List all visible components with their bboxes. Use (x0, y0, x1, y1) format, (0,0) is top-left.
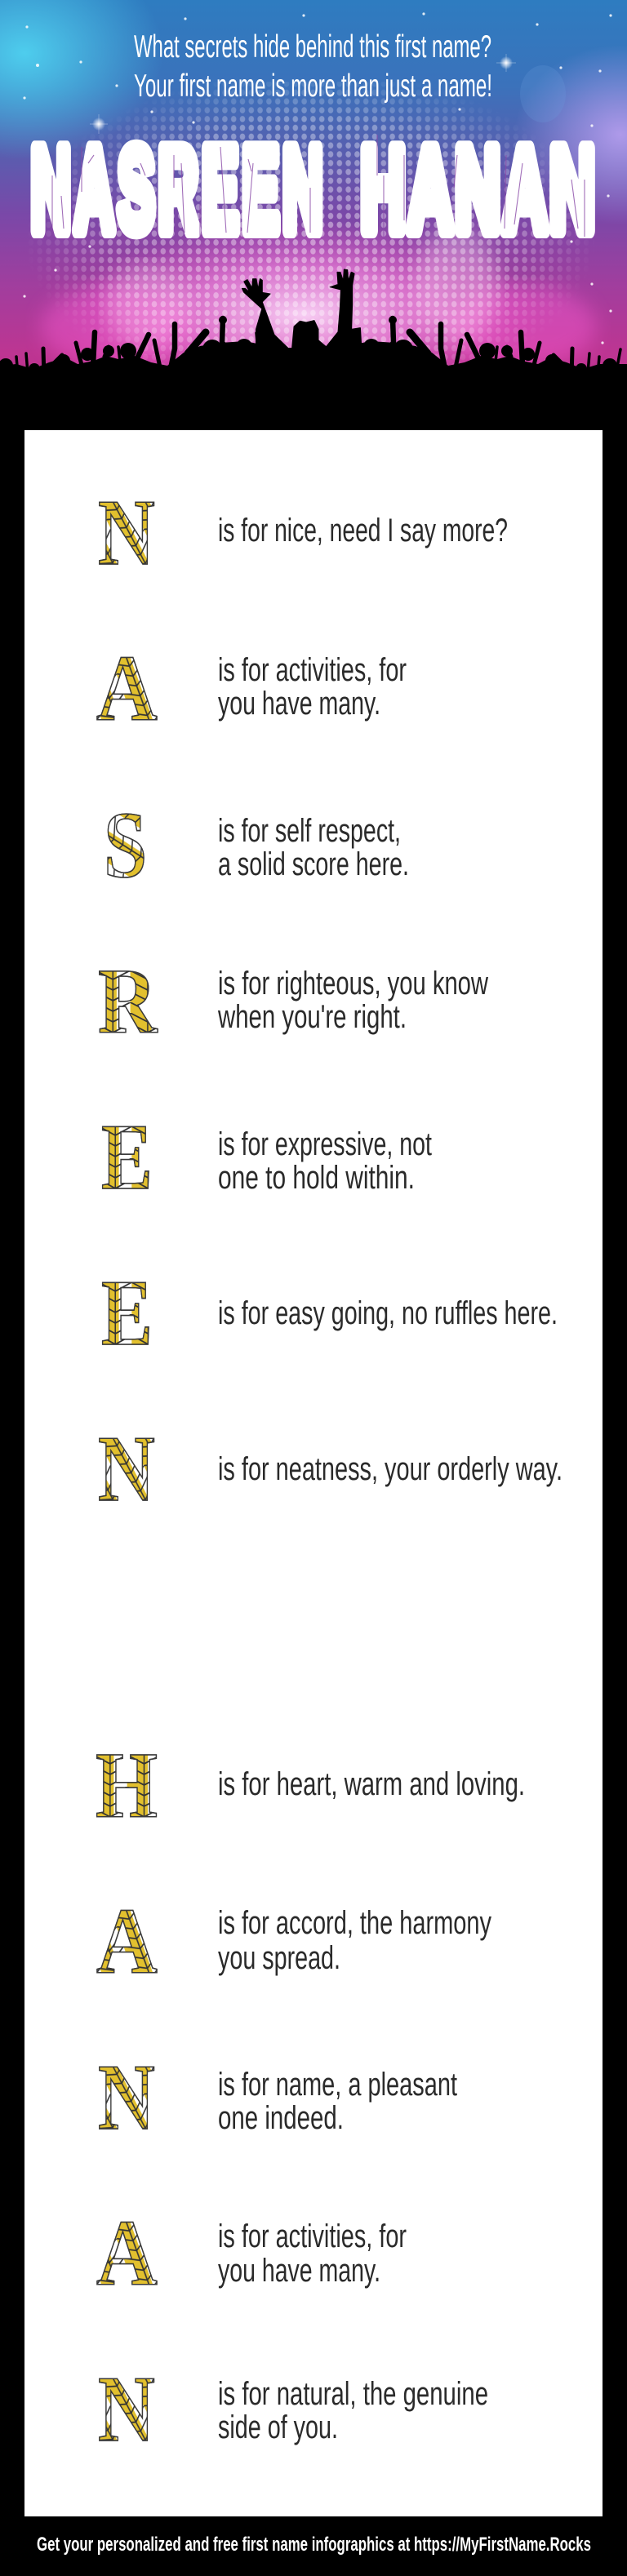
text (218, 2218, 407, 2289)
text: one to hold within. (218, 1160, 415, 1196)
icon: letter A (96, 2222, 158, 2285)
icon: letter A (96, 1910, 158, 1974)
icon: letter R: R (98, 950, 158, 1054)
icon: letter N (99, 2378, 155, 2441)
text: you spread. (218, 1940, 340, 1976)
icon: letter A: A (96, 637, 158, 740)
row: N is for neatness (99, 1438, 560, 1501)
icon: letter N: N (98, 480, 155, 584)
text: is for self respect, (218, 813, 401, 849)
header tagline (134, 29, 492, 104)
icon: letter A: A (96, 637, 158, 740)
icon: letter A (96, 656, 158, 720)
text (218, 652, 407, 722)
row: N is for name (99, 2067, 457, 2130)
icon: letter A: A (96, 2201, 158, 2305)
icon: letter H: H (96, 1734, 158, 1838)
text: is for heart, warm and loving. (218, 1766, 525, 1802)
text: is for accord, the harmony (218, 1905, 491, 1941)
text (218, 2376, 488, 2445)
icon: letter E: E (101, 1104, 153, 1209)
icon: letter N: N (98, 1416, 155, 1521)
icon: letter R: R (98, 950, 158, 1054)
icon: letter E (101, 1126, 149, 1189)
icon: letter N: N (98, 2356, 155, 2461)
panel: letter meanings (24, 430, 603, 2516)
icon: letter S (107, 813, 145, 878)
text: you have many. (218, 686, 380, 722)
icon: letter E: E (101, 1104, 153, 1209)
text: is for expressive, not (218, 1126, 432, 1162)
title: name (31, 123, 595, 256)
header banner: concert stage background (0, 0, 627, 367)
title: name: NASREEN (31, 123, 322, 256)
icon: letter N (99, 501, 155, 565)
row: R is for righteous (99, 970, 488, 1035)
row: N is for natural (99, 2378, 487, 2445)
icon: letter N: N (98, 2045, 155, 2149)
text (218, 2067, 457, 2136)
title: name: HANAN (360, 123, 595, 255)
icon: letter N: N (98, 2045, 155, 2149)
row: S is for self respect (107, 813, 407, 878)
icon: letter A: A (96, 2201, 158, 2305)
icon: letter N: N (98, 1416, 155, 1521)
text: is for activities, for (218, 652, 407, 688)
icon: letter R (99, 970, 158, 1033)
text: you have many. (218, 2253, 380, 2289)
row: N is for nice (99, 501, 507, 565)
text: is for natural, the genuine (218, 2376, 488, 2412)
text: is for nice, need I say more? (218, 513, 508, 549)
text (217, 966, 488, 1035)
icon: letter E (101, 1281, 149, 1345)
icon: letter S: S (104, 793, 147, 897)
text (218, 813, 409, 882)
text: is for activities, for (218, 2218, 407, 2254)
text: a solid score here. (218, 846, 409, 882)
crowd silhouette (0, 269, 627, 430)
icon: letter H (96, 1754, 157, 1817)
text: side of you. (218, 2409, 338, 2445)
icon: letter N: N (98, 480, 155, 584)
row: A is for activities (96, 656, 407, 722)
text: is for name, a pleasant (218, 2067, 457, 2103)
icon: letter H: H (96, 1734, 158, 1838)
icon: letter E: E (101, 1260, 153, 1365)
text: one indeed. (218, 2100, 344, 2136)
icon: letter N (99, 1438, 155, 1501)
text: when you're right. (217, 999, 407, 1035)
row: E is for expressive (101, 1126, 432, 1189)
row: H is for heart (96, 1754, 522, 1817)
row: A is for activities (96, 2222, 407, 2289)
text (218, 1905, 491, 1976)
icon: letter S: S (104, 793, 147, 897)
icon: letter E: E (101, 1260, 153, 1365)
icon: letter A: A (96, 1890, 158, 1993)
row: A is for accord (96, 1910, 491, 1975)
text (218, 1126, 432, 1196)
text: is for righteous, you know (218, 966, 488, 1002)
row: E is for easy going (101, 1281, 555, 1345)
icon: letter N: N (98, 2356, 155, 2461)
icon: letter N (99, 2067, 155, 2130)
icon: letter A: A (96, 1890, 158, 1993)
